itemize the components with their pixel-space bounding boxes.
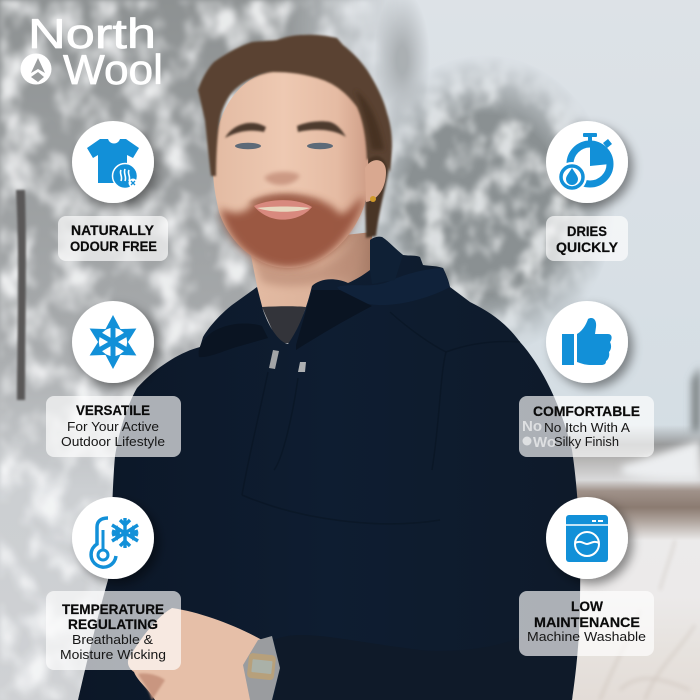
icon: stopwatch with water drop [546,121,628,203]
label panel: Silky Finish [554,434,619,449]
label panel: DRIES [567,223,607,239]
feature: comfortable [519,301,654,457]
shirt cuff [274,600,580,700]
logo wordmark: North [28,10,156,57]
label panel [546,216,628,261]
sweater seams [242,312,520,524]
label panel: Moisture Wicking [60,647,166,662]
label panel: Machine Washable [527,629,646,644]
person: man in navy merino hoodie [78,35,580,700]
label panel: LOW [571,598,604,614]
label panel: Breathable & [72,632,153,647]
logo wordmark [28,10,163,93]
label panel: ODOUR FREE [70,238,157,254]
icon: six arrow snowflake [72,301,154,383]
feature: versatile [46,301,181,457]
head [198,35,392,268]
icon: washing machine [546,497,628,579]
watermark logo: Wo [533,434,556,451]
inner dark shirt [262,306,306,343]
logo wordmark: Wool [63,46,163,93]
label panel: COMFORTABLE [533,403,640,419]
watermark logo [522,421,556,447]
label panel: QUICKLY [556,239,619,255]
feature: temperature regulating [46,497,181,670]
hair behind the head [364,150,390,238]
ear and earring [365,160,386,202]
mouth [254,200,312,220]
zipper pulls [269,350,306,372]
label panel [46,396,181,457]
label panel: No Itch With A [544,420,630,435]
eyebrows [225,123,266,138]
label panel [519,591,654,656]
icon: thumbs up [546,301,628,383]
label panel: VERSATILE [76,402,150,418]
wristwatch [243,636,280,700]
label panel [46,591,181,670]
label panel: Outdoor Lifestyle [61,434,165,449]
feature: low maintenance [519,497,654,656]
label panel: NATURALLY [71,222,155,238]
label panel: REGULATING [68,616,158,632]
feature: naturally odour free [58,121,168,261]
eyes [235,143,261,149]
logo: North Wool [20,10,163,93]
sweater body [78,237,580,700]
hand and wrist [128,608,268,700]
label panel [58,216,168,261]
feature: dries quickly [546,121,628,261]
label panel: MAINTENANCE [534,614,640,630]
beard [220,194,364,268]
icon: t-shirt with odour crossed [72,121,154,203]
watermark logo: No [522,418,542,435]
hair [198,35,392,176]
icon: thermometer and snowflake [72,497,154,579]
nose shadow [264,172,300,185]
hood and collar folds [199,237,450,357]
label panel: TEMPERATURE [62,601,164,617]
label panel: For Your Active [67,419,159,434]
neck [250,232,372,310]
logo compass badge [20,54,52,84]
label panel [519,396,654,457]
